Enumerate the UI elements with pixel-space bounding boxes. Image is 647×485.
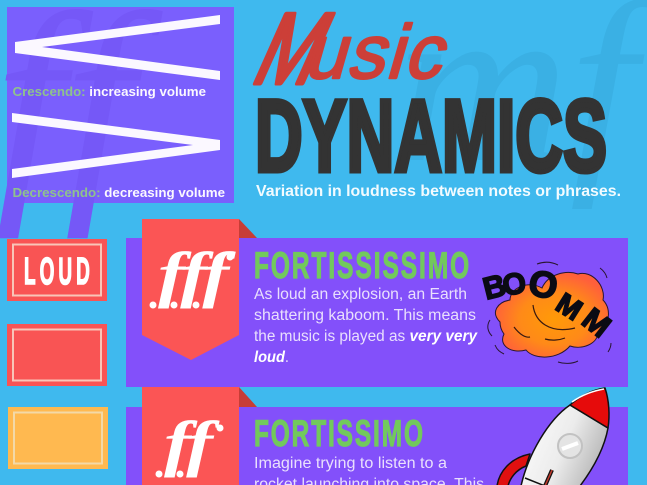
body text: fortississimo: shattering kaboom. This means [254, 307, 476, 324]
ribbon: ff: ff [164, 409, 220, 478]
panel: fortissimo [126, 387, 628, 485]
icon: boom explosion: B [479, 267, 510, 307]
body text: fortississimo [254, 286, 478, 366]
watermark: dynamics letters [0, 0, 647, 240]
body text: fortississimo: As loud an explosion, an Earth [254, 286, 467, 303]
body text: fortissimo [254, 455, 484, 485]
decrescendo label: Decrescendo: decreasing volume [12, 185, 225, 200]
icon: boom explosion: M [576, 301, 617, 344]
panel: crescendo and decrescendo key [0, 0, 234, 240]
body text: fortissimo: Imagine trying to listen to a [254, 455, 447, 472]
title: Music [239, 0, 461, 105]
icon: boom explosion: O [500, 266, 529, 303]
icon: decrescendo hairpin [12, 113, 220, 178]
icon: boom explosion: M [550, 287, 587, 327]
icon: crescendo hairpin [15, 15, 220, 80]
heading: fortissimo: FORTISSIMO [254, 413, 423, 454]
subtitle: Variation in loudness between notes or phrases. [256, 183, 621, 200]
scale box: loud [7, 239, 107, 301]
icon: boom explosion [479, 262, 617, 363]
scale box: level three [8, 407, 108, 469]
panel: fortississimo [126, 219, 628, 387]
title: Music: usic [298, 10, 461, 95]
icon: rocket [497, 388, 609, 485]
heading: fortississimo: FORTISSISSIMO [254, 245, 469, 286]
scale box: level two [7, 324, 107, 386]
body text: fortississimo: the music is played as very very [254, 328, 478, 345]
ribbon: ff [142, 387, 257, 485]
scale box: loud: LOUD [24, 251, 94, 293]
body text: fortississimo: loud. [254, 349, 289, 366]
ribbon: fff [142, 219, 257, 360]
icon: boom explosion: O [525, 262, 561, 307]
crescendo label: Crescendo: increasing volume [12, 84, 206, 99]
ribbon: fff: fff [158, 240, 236, 309]
